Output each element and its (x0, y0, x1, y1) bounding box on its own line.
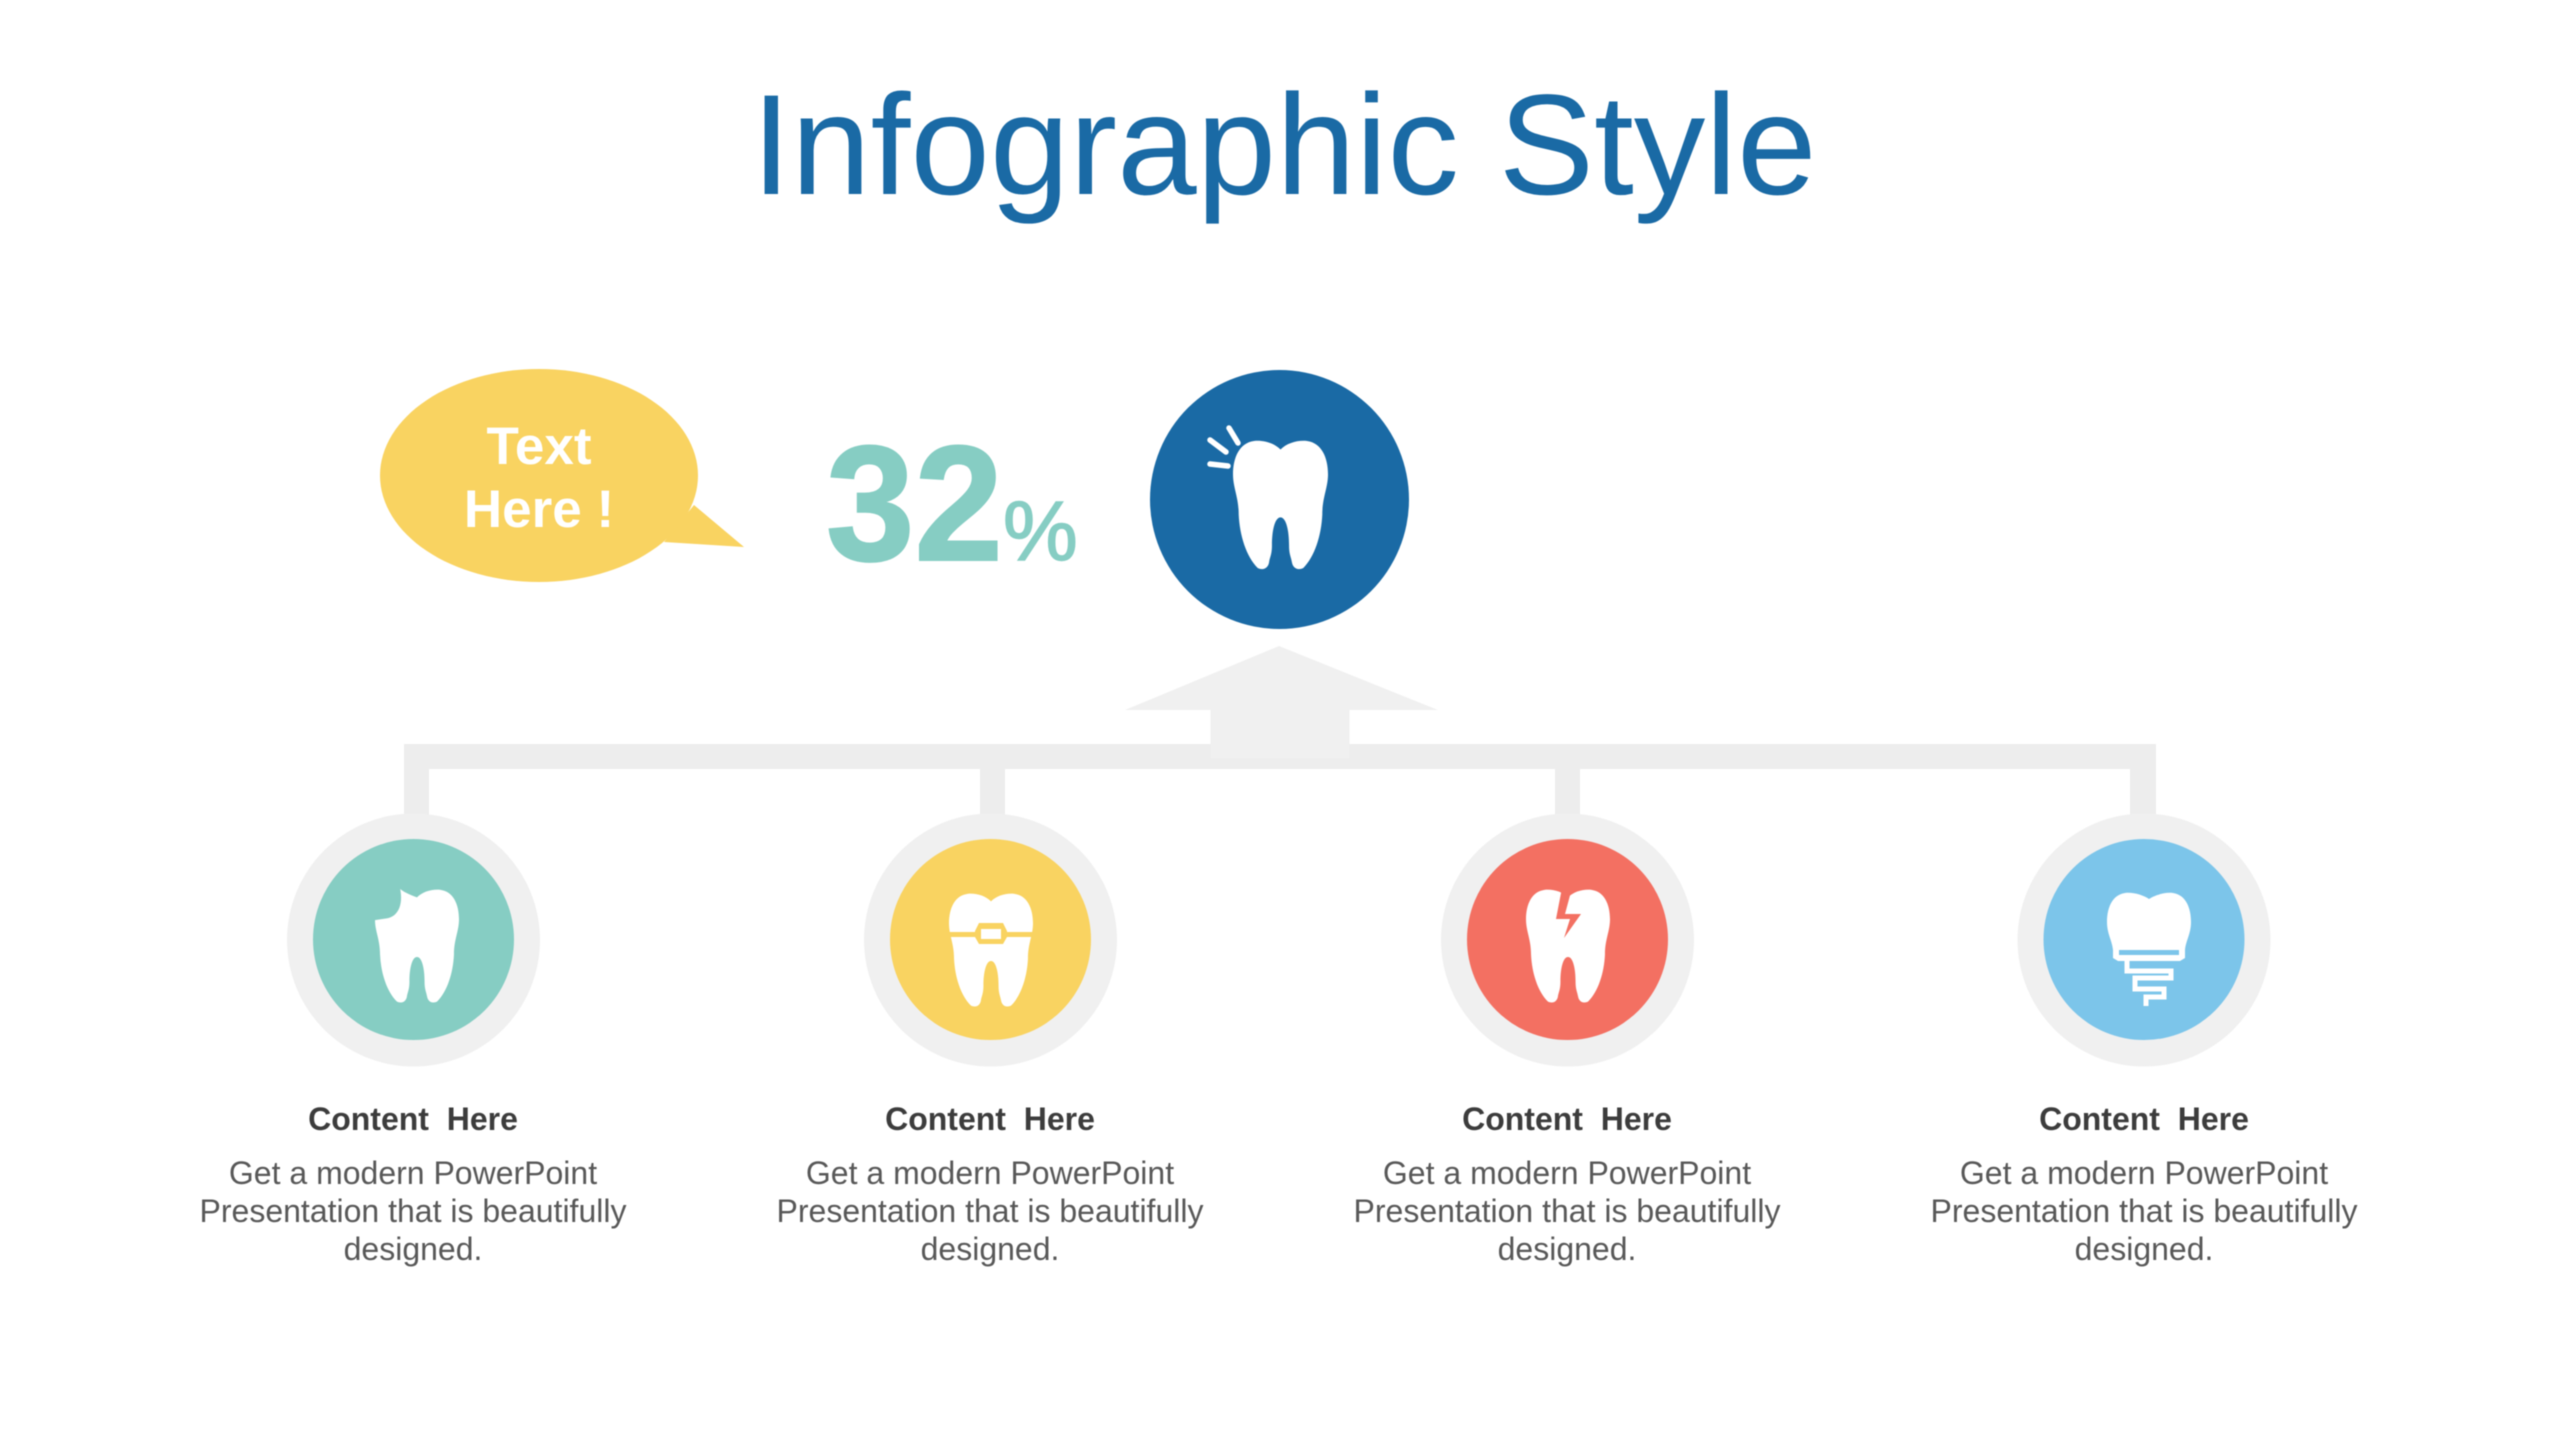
item 4 text: Get a modern PowerPoint (1960, 1155, 2328, 1191)
main icon: aching tooth (1150, 370, 1409, 629)
item 3 text: Presentation that is beautifully (1354, 1193, 1780, 1229)
item 1 text (200, 1101, 626, 1267)
item 1 text: Presentation that is beautifully (200, 1193, 626, 1229)
item 3: cracked tooth (1441, 814, 1694, 1066)
item 4 text (1931, 1101, 2357, 1267)
callout: speech bubble: Text (486, 417, 592, 476)
item 4 text: designed. (2075, 1231, 2213, 1267)
item 2 text: designed. (921, 1231, 1059, 1267)
statistic: 32 percent: % (1003, 484, 1078, 578)
item 1 text: Get a modern PowerPoint (229, 1155, 597, 1191)
title: Infographic Style (751, 66, 1817, 225)
item 1 text: designed. (344, 1231, 482, 1267)
item 2 text: Get a modern PowerPoint (806, 1155, 1174, 1191)
item 2 text: Content Here (885, 1101, 1095, 1137)
item 1 text: Content Here (308, 1101, 518, 1137)
arrow up (1125, 646, 1438, 758)
item 3 text: Get a modern PowerPoint (1383, 1155, 1751, 1191)
item 2 text (777, 1101, 1203, 1267)
item 4 text: Content Here (2039, 1101, 2249, 1137)
item 3 text: Content Here (1462, 1101, 1672, 1137)
item 2 text: Presentation that is beautifully (777, 1193, 1203, 1229)
callout: speech bubble (380, 369, 744, 582)
item 3 text (1354, 1101, 1780, 1267)
callout: speech bubble: Here ! (464, 480, 614, 539)
item 2: tooth with brace (864, 814, 1117, 1066)
connector tree (404, 744, 2156, 815)
item 4: dental implant (2018, 814, 2270, 1066)
statistic: 32 percent: 32 (826, 413, 1003, 596)
item 3 text: designed. (1498, 1231, 1636, 1267)
item 4 text: Presentation that is beautifully (1931, 1193, 2357, 1229)
item 1: chipped tooth (287, 814, 540, 1066)
